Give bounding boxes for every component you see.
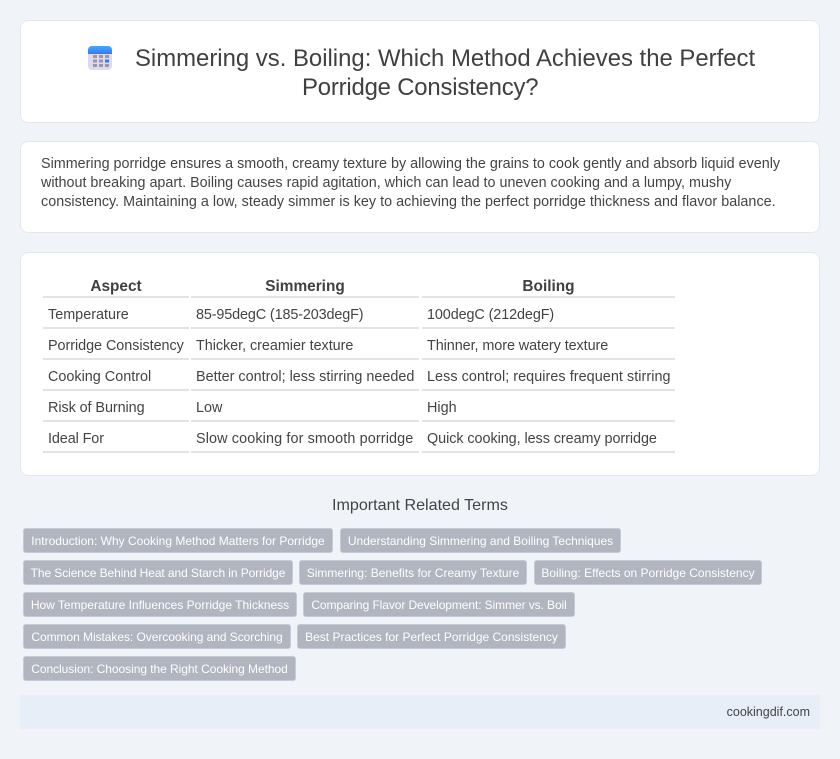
row: cooking control: Cooking Control: [48, 369, 151, 385]
tag: Boiling: Effects on Porridge Consistency: [541, 566, 755, 580]
title: Simmering vs. Boiling: Which Method Achieves the Perfect: [135, 45, 755, 72]
title: Porridge Consistency?: [302, 74, 538, 101]
table header: aspect: Aspect: [90, 278, 142, 295]
table header: boiling: Boiling: [522, 278, 575, 295]
tag: [297, 624, 566, 649]
tag: Comparing Flavor Development: Simmer vs. Boil: [311, 598, 567, 612]
summary text: consistency. Maintaining a low, steady simmer is key to achieving the perfect porridge thickness and flavor balance.: [41, 194, 776, 210]
row: risk of burning: Risk of Burning: [48, 400, 145, 416]
simmering risk: Low: [196, 400, 222, 416]
boiling risk: High: [427, 400, 457, 416]
simmering control: Better control; less stirring needed: [196, 369, 414, 385]
tag: [23, 528, 333, 553]
row: porridge consistency: Porridge Consistency: [48, 338, 184, 354]
icon: calendar: [88, 46, 112, 70]
tag: Best Practices for Perfect Porridge Consistency: [305, 630, 558, 644]
related terms heading: Important Related Terms: [332, 496, 508, 514]
tag group: related terms: [23, 528, 762, 681]
footer source text: cookingdif.com: [727, 705, 810, 719]
summary text: Simmering porridge ensures a smooth, creamy texture by allowing the grains to cook gently and absorb liquid evenly: [41, 156, 780, 172]
simmering temperature: 85-95degC (185-203degF): [196, 307, 363, 323]
title: [135, 45, 755, 101]
tag: [299, 560, 527, 585]
tag: [303, 592, 575, 617]
boiling consistency: Thinner, more watery texture: [427, 338, 608, 354]
panel: title card: [20, 20, 820, 123]
tag: [340, 528, 621, 553]
tag: Conclusion: Choosing the Right Cooking Method: [31, 662, 288, 676]
tag: Understanding Simmering and Boiling Techniques: [348, 534, 613, 548]
boiling temperature: 100degC (212degF): [427, 307, 554, 323]
row: temperature: Temperature: [48, 307, 129, 323]
panel: summary card: [20, 141, 820, 233]
tag: Common Mistakes: Overcooking and Scorching: [31, 630, 283, 644]
tag: [534, 560, 762, 585]
tag: [23, 592, 297, 617]
footer bar: [20, 695, 820, 729]
summary text: [41, 156, 780, 210]
tag: [23, 656, 296, 681]
tag: Simmering: Benefits for Creamy Texture: [307, 566, 519, 580]
tag: [23, 560, 293, 585]
tag: The Science Behind Heat and Starch in Porridge: [31, 566, 285, 580]
table header: simmering: Simmering: [265, 278, 345, 295]
simmering ideal use: Slow cooking for smooth porridge: [196, 431, 413, 447]
tag: How Temperature Influences Porridge Thickness: [31, 598, 289, 612]
tag: Introduction: Why Cooking Method Matters for Porridge: [31, 534, 325, 548]
panel: comparison table: [20, 252, 820, 476]
simmering consistency: Thicker, creamier texture: [196, 338, 353, 354]
tag: [23, 624, 291, 649]
boiling ideal use: Quick cooking, less creamy porridge: [427, 431, 657, 447]
row: ideal for: Ideal For: [48, 431, 104, 447]
summary text: without breaking apart. Boiling causes rapid agitation, which can lead to uneven cooking and a lumpy, mushy: [41, 175, 731, 191]
boiling control: Less control; requires frequent stirring: [427, 369, 671, 385]
